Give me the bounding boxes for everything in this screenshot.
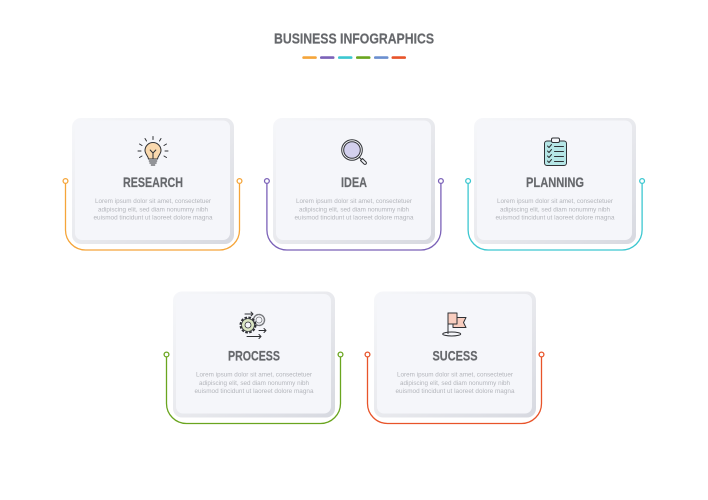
body text: process: adipiscing elit, sed diam nonummy nibh	[199, 380, 309, 387]
body text: success: euismod tincidunt ut laoreet dolore magna	[396, 388, 515, 395]
body text: idea: euismod tincidunt ut laoreet dolore magna	[294, 215, 414, 222]
heading: research: RESEARCH	[123, 175, 183, 190]
icon: flag on hole	[443, 313, 466, 336]
colour dash row	[302, 56, 406, 59]
body text: research	[94, 198, 213, 222]
body text: research: euismod tincidunt ut laoreet dolore magna	[94, 215, 213, 222]
icon: magnifying glass	[342, 140, 366, 164]
body text: process: euismod tincidunt ut laoreet dolore magna	[194, 388, 314, 395]
panel: planning	[466, 118, 644, 250]
heading: process: PROCESS	[228, 348, 280, 363]
body text: research: Lorem ipsum dolor sit amet, consectetuer	[95, 198, 211, 205]
body text: planning: adipiscing elit, sed diam nonummy nibh	[500, 206, 610, 213]
connector: planning	[466, 179, 644, 250]
connector: research	[63, 179, 242, 250]
connector: idea	[264, 179, 443, 250]
connector: success	[365, 352, 544, 424]
icon: light bulb	[138, 136, 168, 165]
body text: idea: Lorem ipsum dolor sit amet, consectetuer	[296, 198, 412, 205]
body text: success: Lorem ipsum dolor sit amet, consectetuer	[397, 372, 513, 378]
heading: idea: IDEA	[341, 175, 367, 190]
body text: planning	[496, 198, 615, 222]
body text: idea: adipiscing elit, sed diam nonummy nibh	[299, 206, 409, 213]
heading: planning: PLANNING	[526, 175, 584, 190]
body text: planning: Lorem ipsum dolor sit amet, consectetuer	[497, 198, 613, 205]
icon: gears and arrows	[240, 312, 266, 338]
body text: process	[194, 372, 314, 395]
panel: research	[63, 118, 242, 250]
icon: clipboard checklist	[544, 138, 566, 166]
panel: idea	[264, 118, 443, 250]
title: BUSINESS INFOGRAPHICS	[274, 30, 434, 47]
body text: process: Lorem ipsum dolor sit amet, consectetuer	[196, 372, 312, 378]
connector: process	[164, 352, 343, 424]
body text: success: adipiscing elit, sed diam nonummy nibh	[400, 380, 510, 387]
body text: research: adipiscing elit, sed diam nonummy nibh	[98, 206, 208, 213]
panel: process	[164, 292, 343, 424]
heading: success: SUCESS	[432, 348, 478, 363]
panel: success	[365, 292, 544, 424]
body text: success	[396, 372, 515, 395]
body text: idea	[294, 198, 414, 222]
body text: planning: euismod tincidunt ut laoreet dolore magna	[496, 215, 615, 222]
